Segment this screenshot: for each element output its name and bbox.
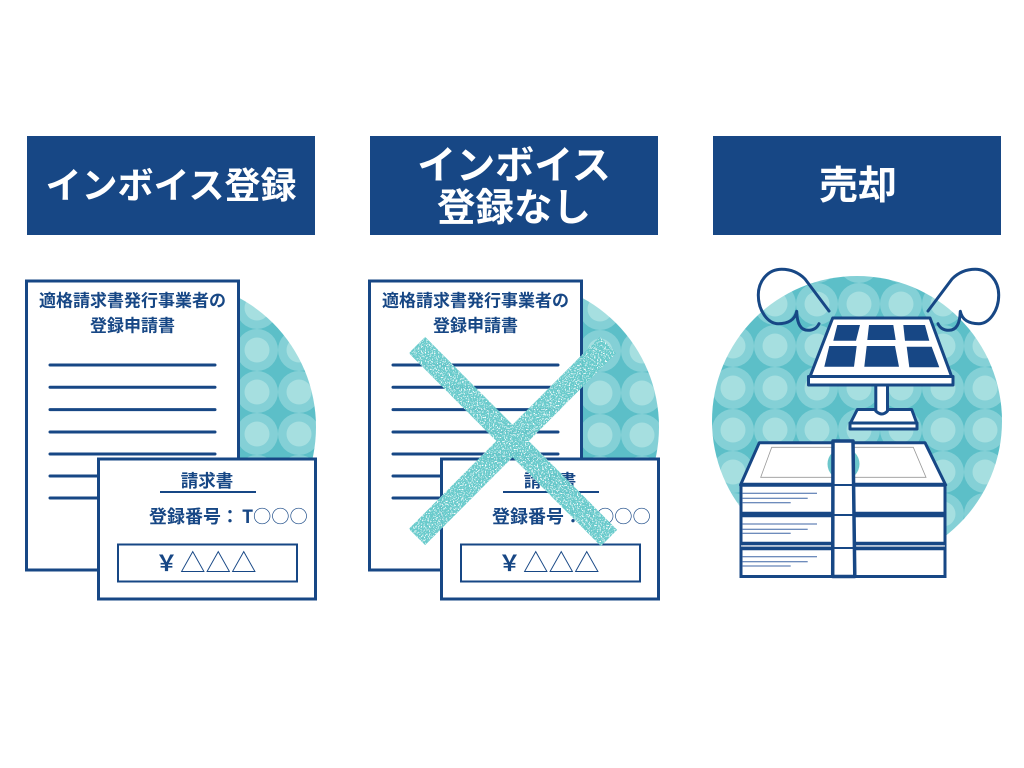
icon: right wing (928, 269, 999, 330)
invoice: 請求書 (181, 468, 233, 493)
heading: 売却: 売却 (819, 155, 897, 211)
application form (370, 281, 582, 570)
icon: stack of money (740, 441, 946, 576)
icon: solar panel (808, 318, 953, 429)
application form: 登録申請書 (433, 312, 518, 336)
icon: left wing (758, 269, 829, 330)
panel: sale of solar panel and money (712, 269, 1002, 576)
patterned circle (583, 298, 659, 458)
invoice: ○○○ (596, 503, 651, 529)
heading: インボイス登録なし (370, 135, 658, 235)
panel: registered documents (22, 280, 316, 599)
panel: not registered documents (365, 280, 659, 599)
invoice: ￥ (155, 546, 178, 578)
application form: 適格請求書発行事業者の (382, 286, 569, 312)
heading: インボイス登録なし: 登録なし (437, 177, 591, 233)
heading: インボイス登録 (27, 136, 315, 235)
patterned circle (712, 276, 1002, 566)
invoice: ○○○ (253, 503, 308, 529)
invoice (98, 459, 316, 599)
invoice: △△△ (523, 543, 600, 580)
invoice: 登録番号： (492, 503, 582, 529)
invoice: 登録番号： (149, 503, 239, 529)
invoice: T (242, 503, 253, 529)
heading: インボイス登録: インボイス登録 (46, 157, 296, 209)
invoice (442, 459, 658, 599)
application form: 適格請求書発行事業者の (39, 286, 226, 312)
application form: 登録申請書 (90, 312, 175, 336)
heading: インボイス登録なし: インボイス (417, 135, 611, 191)
invoice: △△△ (180, 543, 257, 580)
heading: 売却 (713, 136, 1001, 235)
invoice: 請求書 (524, 468, 576, 493)
icon: speckled X mark (417, 345, 609, 538)
invoice: T (585, 503, 596, 529)
application form (26, 281, 238, 570)
invoice: ￥ (498, 546, 521, 578)
patterned circle (240, 298, 316, 458)
